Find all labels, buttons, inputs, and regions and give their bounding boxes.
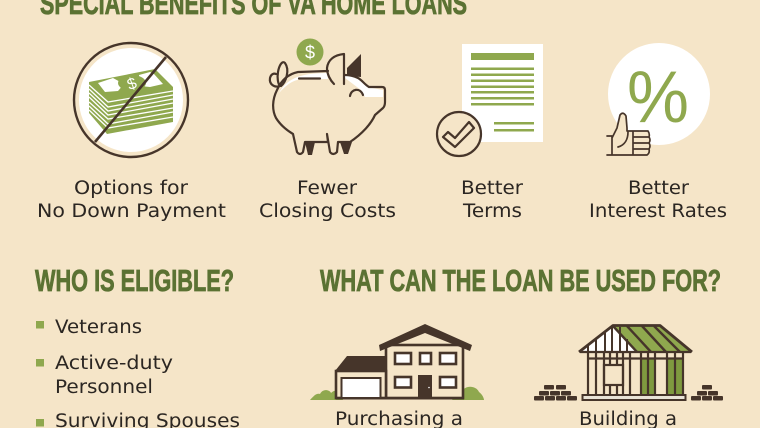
- label: better interest rates: Better: [628, 178, 689, 199]
- icon: no down payment money stack: $: [125, 75, 139, 94]
- label: better interest rates: [589, 178, 727, 222]
- list: eligibility: [36, 317, 240, 428]
- label: better terms: Better: [461, 178, 523, 199]
- label: fewer closing costs: Closing Costs: [259, 201, 396, 222]
- icon: thumbs up: [607, 113, 650, 155]
- icon: no down payment money stack: [74, 43, 188, 157]
- label: no down payment: No Down Payment: [37, 201, 226, 222]
- list: eligibility: Personnel: [55, 377, 153, 398]
- icon: piggy bank: [270, 38, 385, 155]
- label: better interest rates: Interest Rates: [589, 201, 727, 222]
- heading: who is eligible: WHO IS ELIGIBLE?: [35, 264, 234, 298]
- label: no down payment: Options for: [74, 178, 188, 199]
- icon: bricks left: [534, 385, 577, 400]
- icon: check badge: [437, 112, 481, 156]
- label: no down payment: [37, 178, 226, 222]
- label: fewer closing costs: Fewer: [297, 178, 357, 199]
- icon: percent circle with thumb: [607, 43, 710, 155]
- list: eligibility: Active-duty: [55, 353, 173, 374]
- label: better terms: Terms: [462, 201, 522, 222]
- icon: percent circle with thumb: %: [627, 57, 689, 138]
- icon: coin: $: [305, 42, 315, 62]
- icon: bricks right: [691, 385, 723, 400]
- icon: building frame with bricks: [534, 326, 723, 400]
- label: fewer closing costs: [259, 178, 396, 222]
- icon: house: [310, 324, 484, 400]
- label: better terms: [461, 178, 523, 222]
- icon: terms document: [437, 44, 543, 156]
- list: eligibility: Veterans: [55, 317, 142, 338]
